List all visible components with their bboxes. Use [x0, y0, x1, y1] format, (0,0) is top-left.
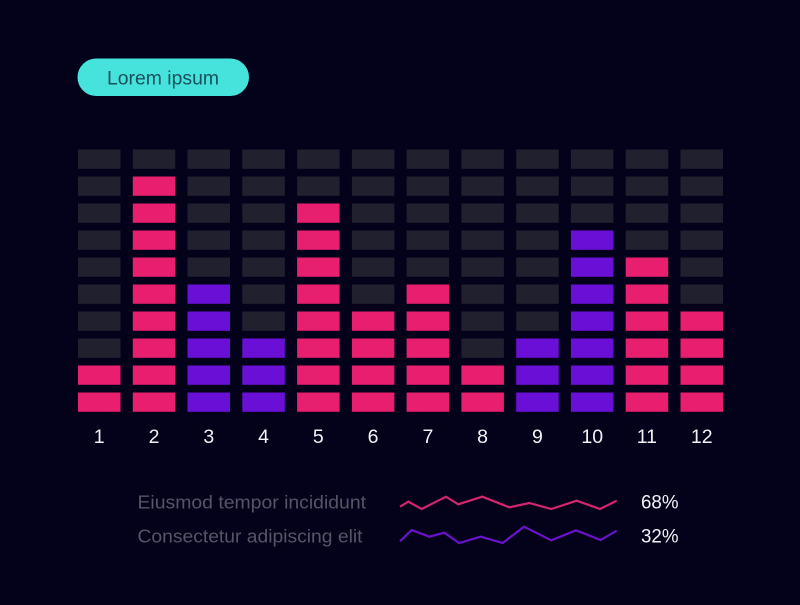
column numbers: 5: [313, 426, 324, 448]
legend label: pink series: Eiusmod tempor incididunt: [138, 492, 366, 512]
column 8 bar: [461, 150, 504, 412]
column numbers: [94, 426, 713, 448]
column 2 bar: [133, 150, 175, 412]
value: 68%: 68%: [641, 492, 679, 514]
column numbers: 6: [368, 426, 379, 448]
sparkline: purple series: [400, 527, 617, 543]
column 1 bar: [78, 150, 120, 412]
value: 32%: 32%: [641, 526, 679, 548]
title pill: Lorem ipsum: [107, 68, 219, 90]
column 11 bar: [626, 150, 668, 412]
column numbers: 1: [94, 426, 105, 448]
column 3 bar: [188, 150, 230, 412]
title pill: [78, 58, 249, 96]
column numbers: 10: [581, 426, 603, 448]
legend row: purple series: [138, 526, 679, 548]
legend row: pink series: [138, 492, 679, 514]
column numbers: 12: [691, 426, 713, 448]
column numbers: 3: [203, 426, 214, 448]
column numbers: 8: [477, 426, 488, 448]
column 4 bar: [242, 150, 285, 412]
column numbers: 11: [637, 426, 657, 448]
column numbers: 2: [149, 426, 159, 448]
column numbers: 4: [258, 426, 269, 448]
column numbers: 9: [532, 426, 543, 448]
column 5 bar: [297, 150, 340, 412]
sparkline: pink series: [400, 497, 617, 509]
column 6 bar: [352, 150, 394, 412]
legend label: purple series: Consectetur adipiscing elit: [138, 526, 362, 546]
column numbers: 7: [422, 426, 433, 448]
bar chart: [78, 150, 723, 412]
column 7 bar: [407, 150, 449, 412]
column 10 bar: [571, 150, 613, 412]
column 12 bar: [680, 150, 723, 412]
column 9 bar: [516, 150, 559, 412]
